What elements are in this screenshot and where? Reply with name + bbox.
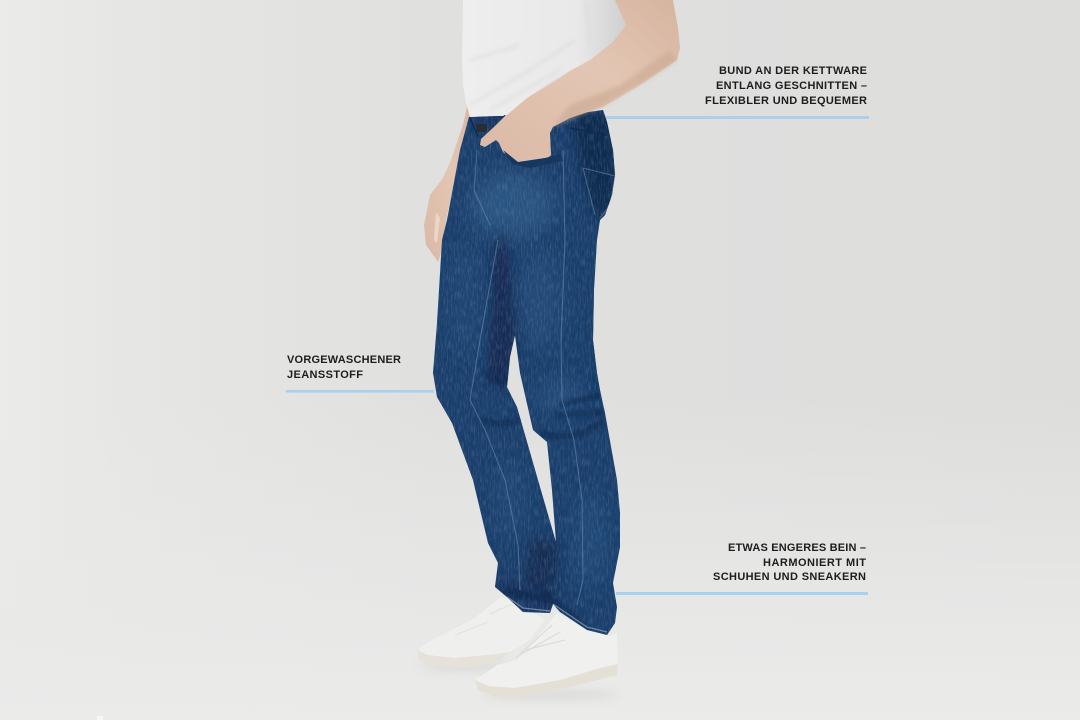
jeans shading <box>470 112 618 612</box>
callout: leg shape <box>616 542 868 595</box>
knee wrinkles <box>480 375 604 625</box>
waistband and belt loop <box>470 115 607 137</box>
callout text: leg shape: SCHUHEN UND SNEAKERN <box>713 571 866 583</box>
back shoe <box>417 597 545 668</box>
callout text: waistband: ENTLANG GESCHNITTEN – <box>716 80 867 92</box>
callout line: waistband <box>606 116 869 119</box>
left arm and hand <box>424 102 472 262</box>
callout text: leg shape <box>713 542 866 583</box>
callout text: waistband: BUND AN DER KETTWARE <box>719 65 867 77</box>
right arm and hand in pocket <box>480 0 680 168</box>
jeans <box>425 105 625 640</box>
floor shadow under shoes <box>419 662 618 699</box>
callout text: leg shape: HARMONIERT MIT <box>763 557 866 569</box>
callout text: fabric: VORGEWASCHENER <box>287 354 401 366</box>
callout text: fabric <box>287 354 401 381</box>
callout line: fabric <box>286 390 434 393</box>
callout: fabric <box>286 354 434 393</box>
seams <box>470 150 615 605</box>
callout text: leg shape: ETWAS ENGERES BEIN – <box>728 542 866 554</box>
white t-shirt <box>462 0 626 117</box>
hem <box>507 597 607 632</box>
callout line: leg shape <box>616 592 868 595</box>
front shoe <box>475 613 618 697</box>
callout text: waistband <box>705 65 867 107</box>
figure: man wearing jeans <box>417 0 680 697</box>
callout text: fabric: JEANSSTOFF <box>287 369 363 381</box>
callout text: waistband: FLEXIBLER UND BEQUEMER <box>705 95 867 107</box>
callout: waistband <box>606 65 869 119</box>
